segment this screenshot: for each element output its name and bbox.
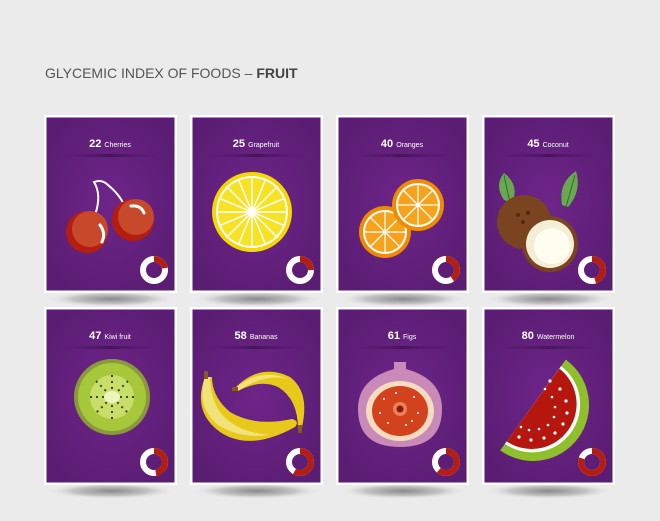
donut: 58 xyxy=(289,451,311,473)
label: figs: 61 Figs xyxy=(388,330,417,342)
icon: bananas xyxy=(201,371,304,441)
label: oranges: 40 Oranges xyxy=(381,138,424,150)
donut: 22 xyxy=(143,259,165,281)
donut: 61 xyxy=(435,451,457,473)
icon: grapefruit xyxy=(212,172,292,252)
panel: cherries xyxy=(44,115,177,307)
panel: kiwi xyxy=(44,307,177,499)
donut: 45 xyxy=(581,259,603,281)
label: cherries: 22 Cherries xyxy=(89,138,131,150)
icon: coconut xyxy=(497,171,578,272)
panel: grapefruit xyxy=(190,115,323,307)
icon: watermelon xyxy=(500,360,589,461)
icon: oranges xyxy=(359,179,444,258)
panel: bananas xyxy=(190,307,323,499)
label: bananas: 58 Bananas xyxy=(235,330,278,342)
donut: 25 xyxy=(289,259,311,281)
donut: 47 xyxy=(143,451,165,473)
label: watermelon: 80 Watermelon xyxy=(522,330,574,342)
icon: kiwi xyxy=(74,359,150,435)
panel: watermelon xyxy=(482,307,615,499)
title: GLYCEMIC INDEX OF FOODS – FRUIT xyxy=(45,65,298,81)
donut: 80 xyxy=(581,451,603,473)
label: grapefruit: 25 Grapefruit xyxy=(233,138,279,150)
label: kiwi: 47 Kiwi fruit xyxy=(89,330,131,342)
panel: figs xyxy=(336,307,469,499)
icon: cherries xyxy=(66,181,154,253)
donut: 40 xyxy=(435,259,457,281)
panel: coconut xyxy=(482,115,615,307)
icon: fig xyxy=(358,362,442,447)
panel: oranges xyxy=(336,115,469,307)
label: coconut: 45 Coconut xyxy=(527,138,569,150)
